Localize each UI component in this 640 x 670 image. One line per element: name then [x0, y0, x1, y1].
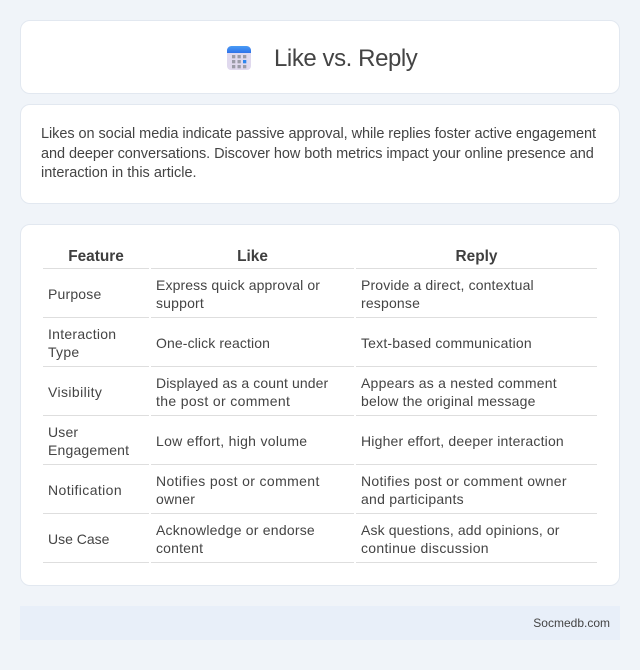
- table: comparison: One-click reaction: [156, 335, 270, 351]
- text: source: Socmedb.com: [533, 616, 610, 630]
- panel: comparison table card: [20, 224, 620, 586]
- table: comparison: Ask questions, add opinions, or: [361, 522, 560, 538]
- text: intro paragraph: and deeper conversations. Discover how both metrics impact your online presence and: [41, 146, 594, 162]
- table: comparison: Acknowledge or endorse: [156, 522, 315, 538]
- table: comparison: Like: [237, 248, 268, 265]
- row: User Engagement: [43, 424, 597, 465]
- table: comparison: Use Case: [48, 531, 109, 547]
- table: comparison: Express quick approval or: [156, 277, 320, 293]
- panel: footer: [20, 606, 620, 640]
- panel: introduction: [20, 104, 620, 204]
- table: comparison: [43, 248, 597, 563]
- table: comparison: Notifies post or comment: [156, 473, 320, 489]
- table: comparison: Reply: [456, 248, 497, 265]
- row: Notification: [43, 473, 597, 514]
- table: comparison: Displayed as a count under: [156, 375, 328, 391]
- panel: title card: [20, 20, 620, 94]
- table: comparison: Type: [48, 344, 79, 360]
- row: Visibility: [43, 375, 597, 416]
- header row: [43, 248, 597, 269]
- table: comparison: content: [156, 540, 203, 556]
- row: Purpose: [43, 277, 597, 318]
- table: comparison: support: [156, 295, 204, 311]
- table: comparison: Interaction: [48, 326, 116, 342]
- table: comparison: Text-based communication: [361, 335, 532, 351]
- table: comparison: owner: [156, 491, 195, 507]
- title: Like vs. Reply: [274, 45, 417, 72]
- table: comparison: below the original message: [361, 393, 536, 409]
- table: comparison: continue discussion: [361, 540, 489, 556]
- table: comparison: Notification: [48, 482, 122, 498]
- table: comparison: Appears as a nested comment: [361, 375, 557, 391]
- table: comparison: and participants: [361, 491, 464, 507]
- table: comparison: Provide a direct, contextual: [361, 277, 534, 293]
- table: comparison: Engagement: [48, 442, 129, 458]
- row: Interaction Type: [43, 326, 597, 367]
- table: comparison: Low effort, high volume: [156, 433, 307, 449]
- table: comparison: Higher effort, deeper interaction: [361, 433, 564, 449]
- table: comparison: Notifies post or comment owner: [361, 473, 567, 489]
- icon: calendar: [227, 46, 251, 70]
- row: Use Case: [43, 522, 597, 563]
- text: intro paragraph: Likes on social media indicate passive approval, while replies foster active engagement: [41, 126, 596, 142]
- table: comparison: the post or comment: [156, 393, 290, 409]
- table: comparison: User: [48, 424, 78, 440]
- table: comparison: response: [361, 295, 420, 311]
- table: comparison: Purpose: [48, 286, 101, 302]
- table: comparison: Visibility: [48, 384, 102, 400]
- text: intro paragraph: interaction in this article.: [41, 165, 197, 181]
- table: comparison: Feature: [68, 248, 124, 265]
- text: intro paragraph: [41, 126, 596, 181]
